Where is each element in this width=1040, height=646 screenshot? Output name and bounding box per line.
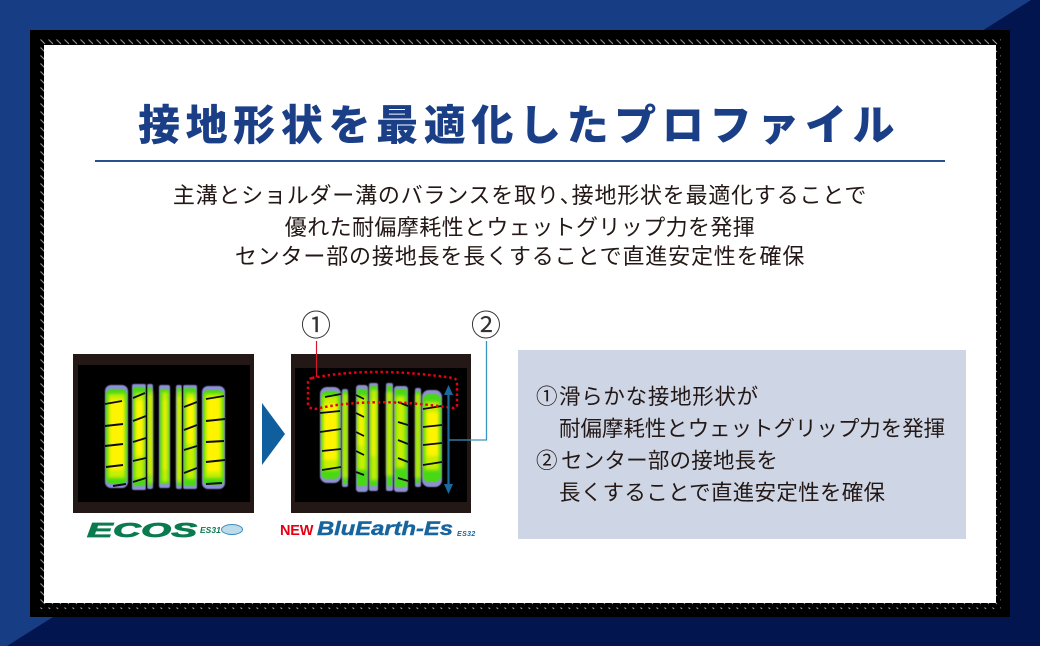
intro text: センター部の接地長を長くすることで直進安定性を確保 bbox=[235, 244, 805, 269]
title: 接地形状を最適化したプロファイル bbox=[138, 102, 900, 149]
tyre footprint: ECOS bbox=[73, 354, 254, 513]
logo: NEW BluEarth-Es bbox=[280, 519, 476, 540]
blue double arrow bbox=[444, 385, 453, 494]
arrow between tyres bbox=[262, 403, 285, 465]
title underline bbox=[95, 160, 945, 162]
logo: NEW BluEarth-Es: ES32 bbox=[457, 531, 476, 538]
intro text: 優れた耐偏摩耗性とウェットグリップ力を発揮 bbox=[285, 215, 755, 240]
red dotted contact area bbox=[308, 372, 457, 409]
intro text bbox=[173, 183, 867, 269]
logo: NEW BluEarth-Es: NEW bbox=[280, 523, 313, 539]
point 1 detail: 耐偏摩耗性とウェットグリップ力を発揮 bbox=[559, 417, 945, 441]
panel: explanation bbox=[518, 350, 966, 539]
point 2 detail: 長くすることで直進安定性を確保 bbox=[559, 481, 885, 505]
marker 2: ② bbox=[471, 310, 501, 343]
marker 1: ① bbox=[301, 310, 331, 343]
logo: ECOS: ECOS bbox=[87, 520, 197, 542]
intro text: 主溝とショルダー溝のバランスを取り、接地形状を最適化することで bbox=[173, 183, 867, 208]
logo: ECOS: ES31 bbox=[200, 525, 221, 535]
logo: NEW BluEarth-Es: BluEarth-Es bbox=[317, 519, 453, 540]
point 1: ①滑らかな接地形状が bbox=[536, 385, 759, 409]
red leader line bbox=[316, 341, 318, 377]
blue leader line bbox=[449, 341, 486, 440]
tyre footprint: BluEarth-Es bbox=[291, 354, 471, 513]
point 2: ②センター部の接地長を bbox=[536, 449, 778, 473]
